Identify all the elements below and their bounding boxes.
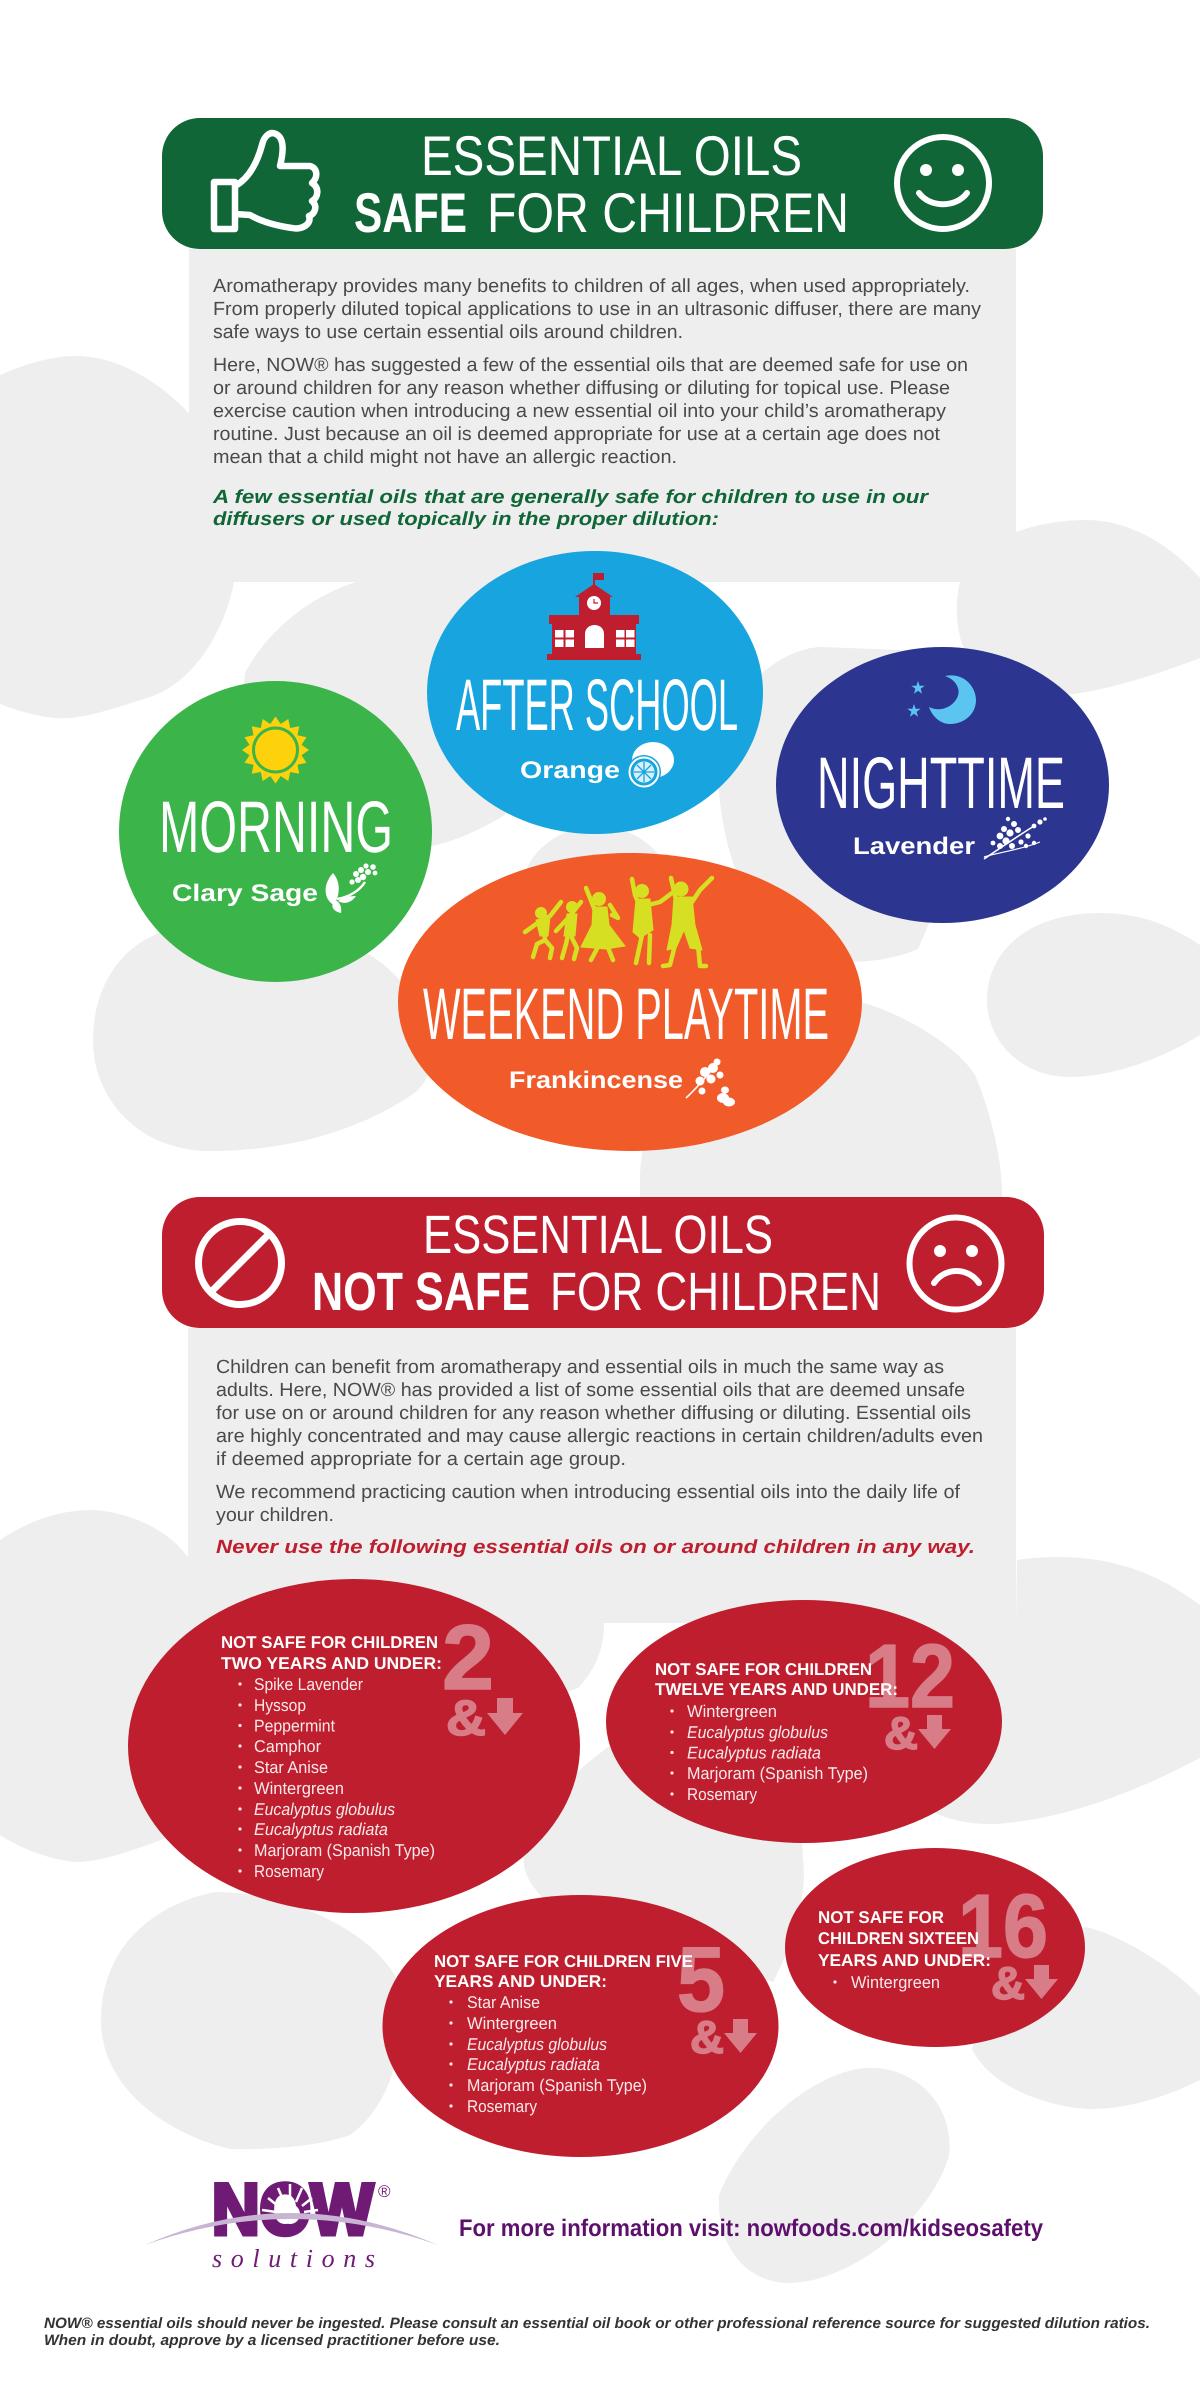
text block: practicing caution: We recommend practicing caution when introducing essential oils into the daily life of — [216, 1482, 961, 1503]
text block: children benefit: adults. Here, NOW® has provided a list of some essential oils that are deemed unsafe — [216, 1380, 965, 1401]
list of oils: Camphor — [254, 1737, 321, 1756]
registered mark: ® — [378, 2182, 391, 2201]
icon: sage sprig — [326, 863, 377, 913]
badge: 12 and down: & — [884, 1707, 918, 1759]
list of oils: Eucalyptus radiata — [467, 2055, 600, 2074]
logo tagline: solutions — [212, 2244, 375, 2273]
list of oils: Rosemary — [687, 1785, 757, 1804]
icon: moon and stars — [907, 675, 976, 724]
label: orange: Orange — [520, 757, 620, 784]
disclaimer: NOW® essential oils should never be ingested. Please consult an essential oil book or other professional reference source for suggested dilution ratios. — [44, 2315, 1150, 2332]
badge: 5 and down: 5 — [677, 1929, 725, 2031]
banner: not safe for children — [162, 1197, 1044, 1328]
heading: TWELVE YEARS AND UNDER: — [655, 1680, 898, 1699]
heading: TWO YEARS AND UNDER: — [221, 1654, 442, 1673]
icon: dancing children — [525, 878, 712, 966]
call to action: more information: For more information visit: nowfoods.com/kidseosafety — [459, 2215, 1044, 2242]
icon: lavender sprig — [984, 817, 1047, 859]
list of oils: Wintergreen — [254, 1779, 344, 1798]
list of oils: Eucalyptus radiata — [687, 1744, 821, 1762]
heading: CHILDREN SIXTEEN — [818, 1929, 979, 1948]
bubble: morning clary sage — [119, 681, 432, 982]
list of oils: Star Anise — [467, 1993, 540, 2012]
title: not safe for children: NOT SAFE — [312, 1262, 530, 1322]
icon: school house — [547, 573, 641, 660]
heading: NOT SAFE FOR — [818, 1908, 944, 1927]
heading: YEARS AND UNDER: — [434, 1972, 607, 1991]
text block: children benefit: Children can benefit from aromatherapy and essential oils in much the same way as — [216, 1357, 944, 1378]
heading — [434, 1952, 693, 1991]
list of oils: Rosemary — [254, 1862, 324, 1881]
list of oils — [449, 1993, 647, 2116]
text block: children benefit: for use on or around children for any reason whether diffusing or diluting. Essential oils — [216, 1403, 971, 1424]
text block: NOW suggestions: mean that a child might not have an allergic reaction. — [213, 447, 677, 468]
list of oils: Eucalyptus globulus — [467, 2035, 607, 2054]
list of oils: Spike Lavender — [254, 1675, 363, 1694]
list of oils: Peppermint — [254, 1716, 335, 1736]
text block: aromatherapy benefits: From properly diluted topical applications to use in an ultrasonic diffuser, there are many — [213, 299, 982, 320]
text block: aromatherapy benefits: Aromatherapy provides many benefits to children of all ages, when used appropriately. — [213, 276, 970, 297]
label: morning: MORNING — [159, 787, 393, 868]
panel: safe intro background — [189, 249, 1016, 582]
heading — [655, 1660, 898, 1699]
bubble: nighttime lavender — [776, 647, 1109, 923]
bubble: two years and under — [128, 1579, 580, 1913]
badge: 16 and down: & — [991, 1957, 1025, 2009]
label: frankincense: Frankincense — [509, 1067, 683, 1094]
list of oils: Wintergreen — [851, 1973, 940, 1992]
heading: NOT SAFE FOR CHILDREN FIVE — [434, 1952, 693, 1971]
list of oils — [238, 1675, 435, 1881]
list of oils: Eucalyptus globulus — [254, 1800, 395, 1819]
list of oils: Star Anise — [254, 1758, 328, 1777]
logo wordmark: NOW — [212, 2170, 373, 2250]
title: not safe for children: FOR CHILDREN — [550, 1262, 881, 1322]
logo swoosh — [145, 2213, 438, 2245]
logo sunburst — [262, 2184, 318, 2224]
text block: children benefit — [216, 1357, 983, 1470]
badge: 5 and down: & — [690, 2011, 724, 2063]
list of oils: Rosemary — [467, 2097, 537, 2116]
heading — [221, 1633, 442, 1673]
list of oils: Wintergreen — [687, 1702, 777, 1721]
callout: generally safe oils — [212, 487, 930, 530]
badge: 12 and down: 12 — [865, 1627, 955, 1727]
label: lavender: Lavender — [853, 833, 975, 860]
banner: safe for children — [162, 118, 1043, 249]
label: weekend playtime: WEEKEND PLAYTIME — [423, 974, 829, 1055]
logo: NOW solutions — [145, 2170, 438, 2273]
text block: practicing caution — [216, 1482, 961, 1526]
title: not safe for children — [312, 1262, 881, 1322]
list of oils: Hyssop — [254, 1696, 306, 1715]
heading: YEARS AND UNDER: — [818, 1951, 991, 1970]
list of oils: Eucalyptus globulus — [687, 1723, 828, 1742]
badge: 16 and down: 16 — [958, 1877, 1048, 1977]
callout: generally safe oils: diffusers or used topically in the proper dilution: — [213, 509, 719, 530]
bubble: weekend playtime frankincense — [398, 853, 862, 1151]
text block: NOW suggestions: routine. Just because an oil is deemed appropriate for use at a certain age does not — [213, 424, 941, 445]
icon: thumbs up — [214, 133, 317, 229]
icon: orange fruit — [627, 742, 674, 789]
list of oils: Eucalyptus radiata — [254, 1820, 388, 1839]
title: essential oils: ESSENTIAL OILS — [423, 1205, 773, 1265]
text block: children benefit: if deemed appropriate for a certain age group. — [216, 1449, 626, 1470]
bubble: twelve years and under — [606, 1600, 1002, 1843]
badge: 2 and down — [442, 1607, 523, 1746]
text block: children benefit: are highly concentrated and may cause allergic reactions in certain children/adults even — [216, 1426, 983, 1447]
heading: NOT SAFE FOR CHILDREN — [655, 1660, 872, 1679]
text block: NOW suggestions: exercise caution when introducing a new essential oil into your child’s aromatherapy — [213, 401, 947, 422]
list of oils — [670, 1702, 868, 1804]
title: essential oils: ESSENTIAL OILS — [421, 124, 802, 187]
badge: 12 and down — [865, 1627, 955, 1759]
disclaimer: When in doubt, approve by a licensed practitioner before use. — [44, 2332, 500, 2349]
list of oils: Marjoram (Spanish Type) — [254, 1841, 435, 1860]
text block: aromatherapy benefits: safe ways to use certain essential oils around children. — [213, 322, 683, 343]
list of oils: Marjoram (Spanish Type) — [467, 2076, 647, 2095]
heading — [818, 1908, 991, 1970]
text block: aromatherapy benefits — [213, 276, 982, 343]
icon: sad face — [910, 1218, 1002, 1310]
callout: generally safe oils: A few essential oils that are generally safe for children to use in our — [212, 487, 930, 508]
title: safe for children: FOR CHILDREN — [487, 181, 849, 244]
callout: never use: Never use the following essential oils on or around children in any way. — [216, 1537, 975, 1558]
title: safe for children: SAFE — [354, 181, 467, 244]
icon: frankincense sprig — [686, 1058, 735, 1106]
text block: NOW suggestions — [213, 355, 968, 468]
icon: prohibition sign — [198, 1222, 282, 1304]
badge: 5 and down — [677, 1929, 757, 2063]
disclaimer — [44, 2315, 1150, 2349]
panel: not safe intro background — [188, 1328, 1016, 1623]
bubble: after school orange: AFTER SCHOOL — [456, 665, 738, 746]
title: safe for children — [354, 181, 849, 244]
text block: practicing caution: your children. — [216, 1505, 334, 1526]
list of oils: Marjoram (Spanish Type) — [687, 1764, 868, 1783]
label: clary sage: Clary Sage — [172, 880, 318, 907]
heading: NOT SAFE FOR CHILDREN — [221, 1633, 438, 1652]
text block: NOW suggestions: Here, NOW® has suggested a few of the essential oils that are deemed safe for use on — [213, 355, 968, 376]
bubble: five years and under — [382, 1895, 778, 2157]
bubble: sixteen years and under — [785, 1848, 1085, 2047]
bubble: after school orange — [427, 551, 763, 834]
badge: 2 and down: 2 — [442, 1607, 494, 1709]
icon: sun — [242, 716, 309, 784]
text block: NOW suggestions: or around children for any reason whether diffusing or diluting for topical use. Please — [213, 378, 950, 399]
list of oils: Wintergreen — [467, 2014, 557, 2033]
badge: 2 and down: & — [446, 1690, 486, 1746]
icon: smiley face — [897, 137, 989, 229]
